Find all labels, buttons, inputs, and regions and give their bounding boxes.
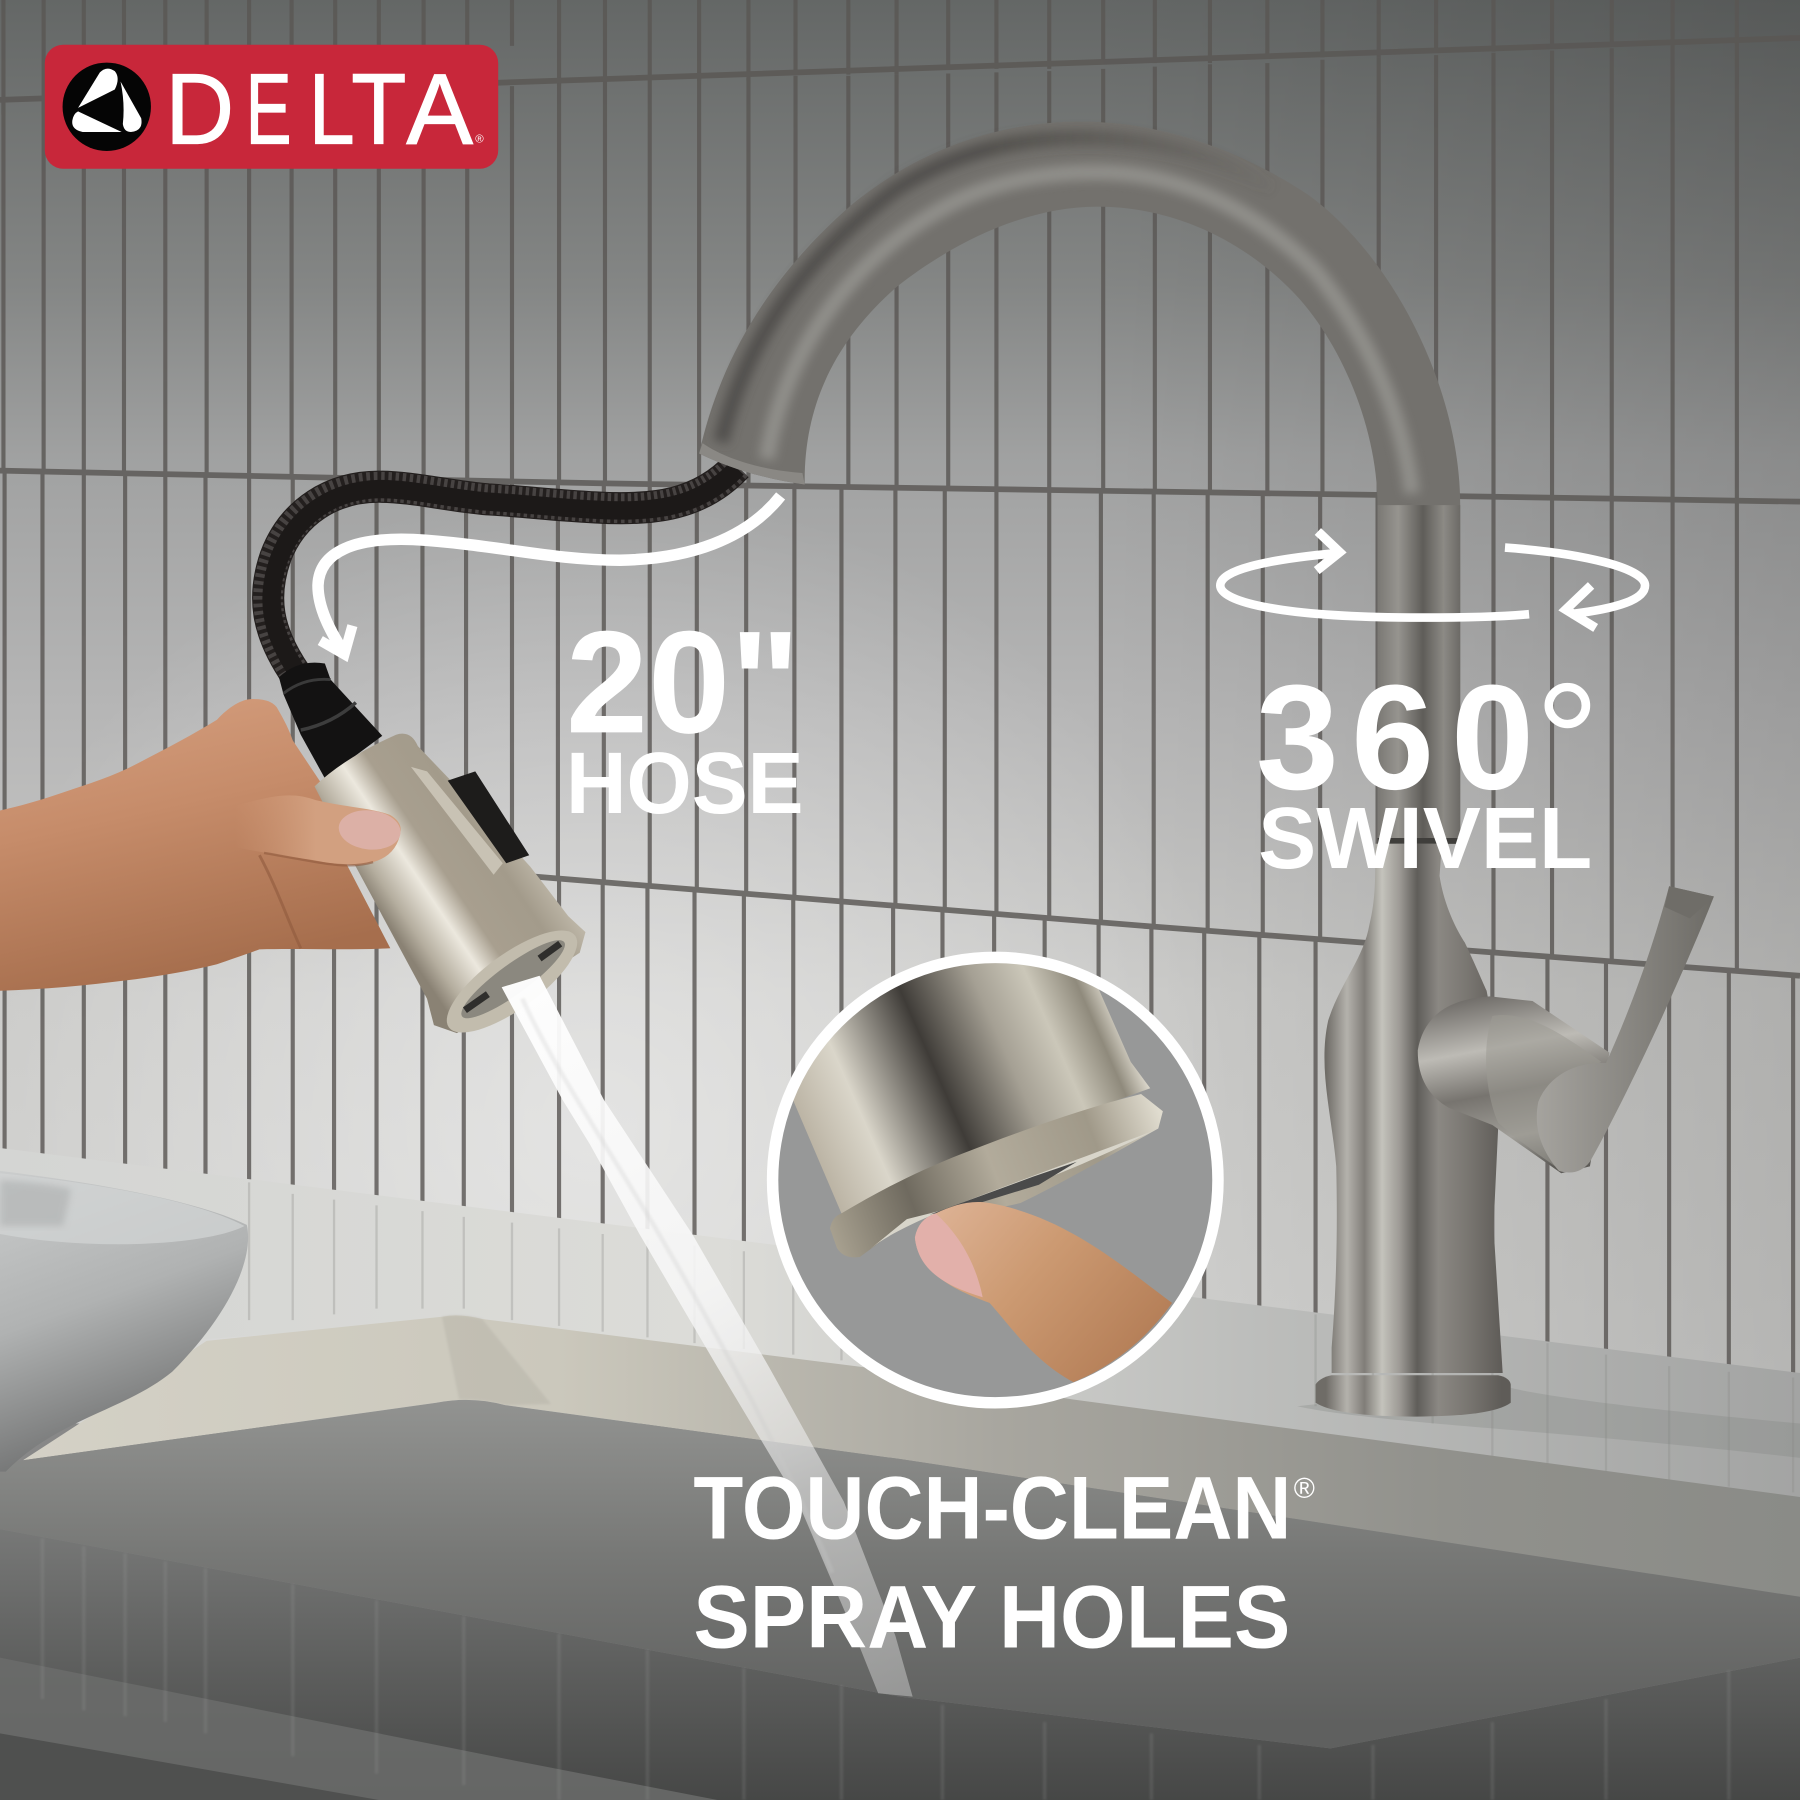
heading: 360 swivel: SWIVEL	[1258, 790, 1592, 887]
faucet base body	[1316, 844, 1511, 1417]
tiled wall background	[0, 0, 1800, 1423]
countertop	[0, 1148, 1800, 1515]
heading: 20 inch hose	[566, 600, 804, 832]
heading: touch-clean spray holes: TOUCH-CLEAN	[693, 1457, 1291, 1557]
heading: 20 inch hose: HOSE	[566, 735, 804, 832]
heading: touch-clean spray holes: SPRAY HOLES	[693, 1566, 1290, 1666]
logo: Delta badge: ®	[475, 133, 484, 145]
pull-down sprayer head	[315, 734, 591, 1050]
heading: 360 swivel	[1256, 649, 1600, 887]
logo: Delta badge: T	[351, 54, 406, 165]
arrow: swivel left	[1220, 532, 1529, 618]
callout: touch-clean spray holes magnifier	[758, 918, 1219, 1404]
logo: Delta badge: E	[246, 54, 292, 165]
hand: palm and fingers	[0, 699, 390, 991]
bowl	[0, 1171, 248, 1472]
arrow: swivel right	[1505, 548, 1645, 628]
logo: Delta badge: L	[309, 54, 355, 165]
water stream	[502, 976, 913, 1697]
hose	[268, 466, 737, 675]
sink basin	[0, 1400, 1800, 1748]
faucet spout	[699, 122, 1460, 844]
logo: Delta badge	[45, 45, 498, 169]
hand: thumb	[235, 795, 403, 865]
basin front reflection	[0, 1529, 1800, 1800]
heading: 360 swivel: °	[1535, 649, 1600, 832]
sink rim	[23, 1315, 1800, 1597]
logo: Delta badge: A	[406, 54, 473, 165]
faucet handle	[1418, 886, 1714, 1173]
logo: Delta badge: D	[165, 54, 234, 165]
heading: 20 inch hose: 20"	[566, 600, 800, 763]
arrow: hose pull-out	[318, 496, 781, 654]
macro sprayer body	[794, 963, 1150, 1213]
heading: touch-clean spray holes	[693, 1457, 1315, 1666]
heading: 360 swivel: 360	[1256, 654, 1534, 821]
icon: Delta tri-drop mark	[63, 63, 151, 151]
heading: touch-clean spray holes: ®	[1294, 1473, 1315, 1505]
macro fingertip	[915, 1202, 1172, 1382]
sprayer connector	[279, 663, 382, 778]
